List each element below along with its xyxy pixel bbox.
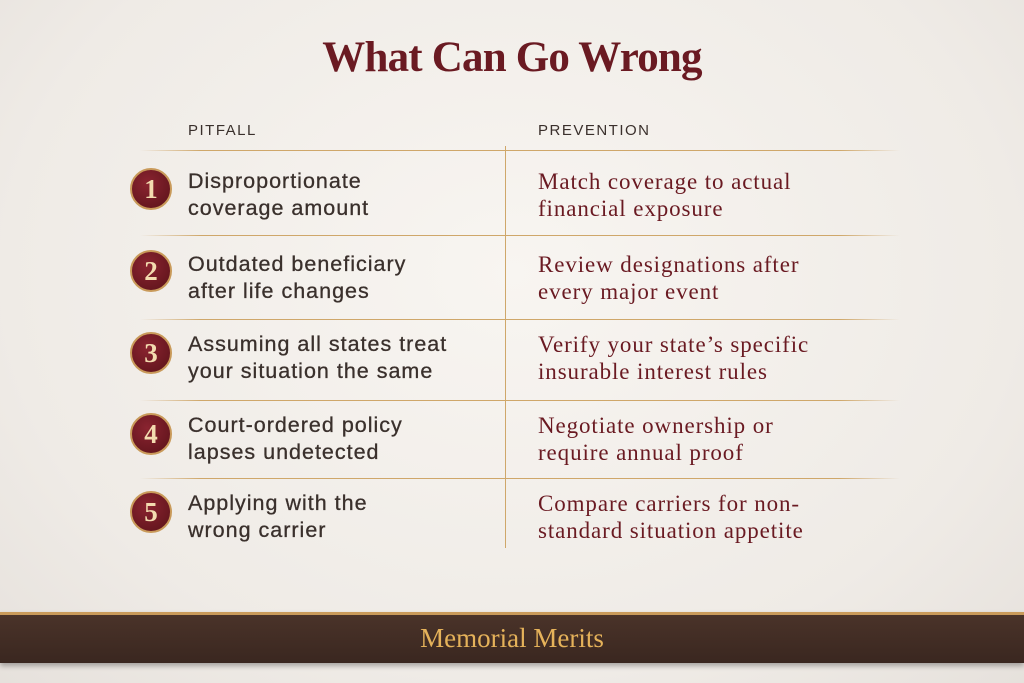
row 5 number: 5 — [144, 497, 158, 527]
row 4 prevention: Negotiate ownership or — [538, 413, 774, 438]
row 5 number — [130, 491, 172, 533]
row 5 pitfall: Applying with the — [188, 491, 368, 515]
row 2 pitfall: Outdated beneficiary — [188, 252, 406, 276]
row 2 number — [130, 250, 172, 292]
row 1 pitfall: Disproportionate — [188, 169, 362, 193]
row 1 number — [130, 168, 172, 210]
row 2 prevention — [538, 252, 799, 304]
row 1 pitfall — [188, 169, 369, 220]
row 3 prevention — [538, 332, 809, 384]
row 4 number — [130, 413, 172, 455]
row 3 prevention: insurable interest rules — [538, 359, 768, 384]
row 1 prevention — [538, 169, 791, 221]
row 3 pitfall: Assuming all states treat — [188, 332, 447, 356]
row 2 pitfall: after life changes — [188, 279, 370, 303]
row 4 prevention: require annual proof — [538, 440, 744, 465]
row 3 number: 3 — [144, 338, 158, 368]
header: prevention: PREVENTION — [538, 122, 651, 139]
footer band — [0, 612, 1024, 663]
row 4 prevention — [538, 413, 774, 465]
row 1 prevention: Match coverage to actual — [538, 169, 791, 194]
row 5 pitfall: wrong carrier — [188, 518, 326, 542]
row 1 pitfall: coverage amount — [188, 196, 369, 220]
row 4 pitfall — [188, 413, 403, 464]
row 3 pitfall — [188, 332, 447, 383]
row 4 pitfall: Court-ordered policy — [188, 413, 403, 437]
row 4 number: 4 — [144, 419, 158, 449]
row 5 prevention: standard situation appetite — [538, 518, 804, 543]
row 3 number — [130, 332, 172, 374]
footer band: Memorial Merits — [420, 623, 604, 653]
row 2 number: 2 — [144, 256, 158, 286]
row 2 prevention: every major event — [538, 279, 719, 304]
title: What Can Go Wrong — [322, 34, 702, 81]
row 5 prevention — [538, 491, 804, 543]
row 5 prevention: Compare carriers for non- — [538, 491, 800, 516]
row 5 pitfall — [188, 491, 368, 542]
row 1 number: 1 — [144, 174, 158, 204]
row 1 prevention: financial exposure — [538, 196, 723, 221]
row 3 prevention: Verify your state’s specific — [538, 332, 809, 357]
row 2 pitfall — [188, 252, 406, 303]
row 4 pitfall: lapses undetected — [188, 440, 380, 464]
row 3 pitfall: your situation the same — [188, 359, 433, 383]
header: pitfall: PITFALL — [188, 122, 257, 139]
row 2 prevention: Review designations after — [538, 252, 799, 277]
